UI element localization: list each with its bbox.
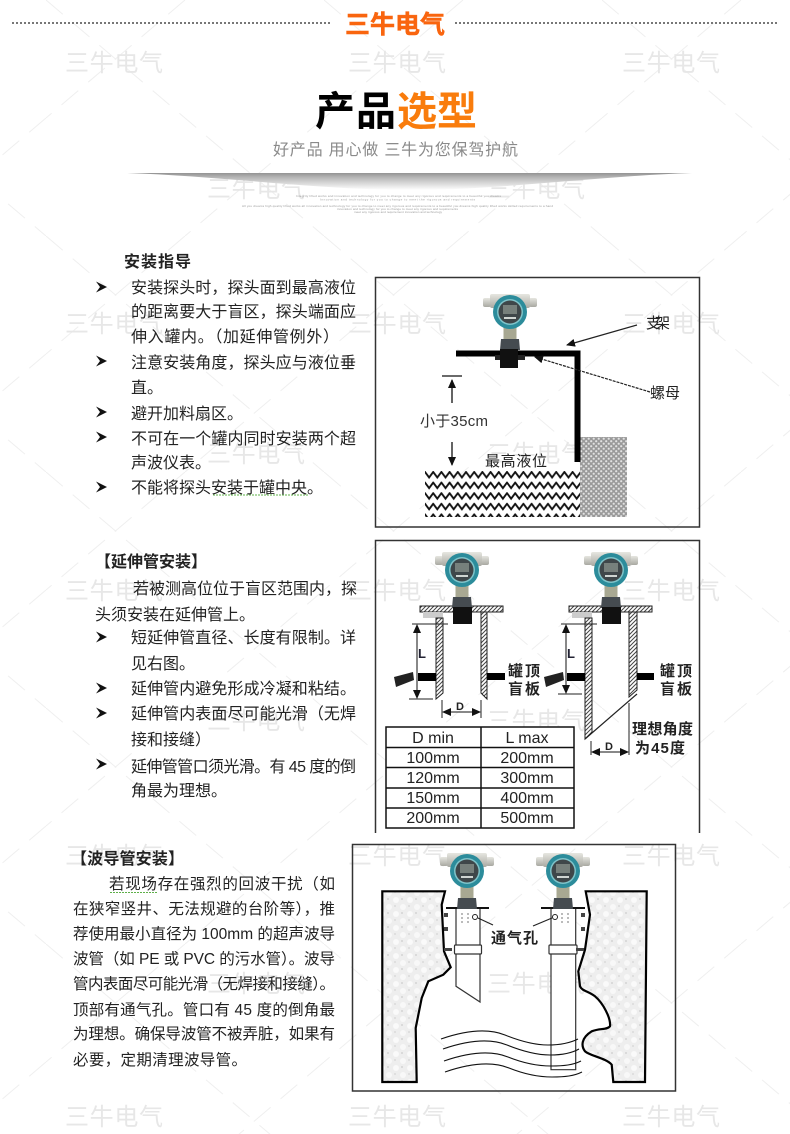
title bbox=[315, 90, 477, 134]
dimension D right: D bbox=[605, 741, 613, 753]
wave liquid surface bbox=[425, 471, 581, 517]
extension list text: 延伸管管口须光滑。有 45 度的倒 bbox=[131, 758, 356, 776]
diagram panel: extension tube bbox=[376, 540, 700, 833]
leader arrow: bracket bbox=[567, 325, 637, 345]
section: extension tube text bbox=[95, 552, 357, 800]
intro paragraph: 若被测高位位于盲区范围内，探 bbox=[133, 580, 357, 598]
watermark: repeated brand name: 三牛电气 bbox=[487, 441, 585, 468]
guide tube paragraph bbox=[73, 875, 335, 1069]
watermark: repeated brand name: 三牛电气 bbox=[207, 176, 305, 203]
guide list text bbox=[131, 279, 356, 497]
size table bbox=[386, 727, 574, 828]
guide list text: 不能将探头安装于罐中央。 bbox=[131, 479, 323, 497]
watermark: repeated brand name: 三牛电气 bbox=[487, 971, 585, 998]
size table: D min bbox=[412, 730, 454, 747]
watermark: repeated brand name: 三牛电气 bbox=[348, 1104, 446, 1131]
label: tank top blind plate left: 罐顶 bbox=[508, 662, 540, 680]
label: ideal angle: 理想角度 bbox=[632, 720, 693, 738]
guide tube paragraph: 若现场存在强烈的回波干扰（如 bbox=[109, 875, 335, 893]
transmitter bbox=[483, 294, 537, 368]
heading: guide tube: 【波导管安装】 bbox=[71, 849, 184, 868]
left tube assembly bbox=[394, 552, 505, 699]
watermark: repeated brand name: 三牛电气 bbox=[487, 176, 585, 203]
title: 产品 bbox=[315, 90, 396, 134]
spelling underline bbox=[110, 892, 157, 894]
tank wall block bbox=[580, 437, 627, 517]
dimension L right: L bbox=[567, 646, 575, 661]
label: tank top blind plate right: 罐顶 bbox=[660, 662, 692, 680]
guide tube paragraph: 顶部有通气孔。管口有 45 度的倒角最 bbox=[73, 1001, 335, 1019]
guide tube paragraph: 波管（如 PE 或 PVC 的污水管）。波导 bbox=[73, 950, 335, 968]
extension list text bbox=[131, 629, 356, 800]
tiny english tagline: Innovation and technology for you to change to meet the rigorous and requirements bbox=[320, 198, 476, 202]
label: ideal angle bbox=[632, 720, 693, 757]
guide list text: 避开加料扇区。 bbox=[131, 405, 243, 423]
title: 选型 bbox=[397, 90, 477, 134]
bullet markers bbox=[96, 632, 107, 770]
section: installation guide text bbox=[96, 253, 356, 497]
intro paragraph: 头须安装在延伸管上。 bbox=[95, 606, 255, 624]
watermark: repeated brand name: 三牛电气 bbox=[622, 50, 720, 77]
watermark: repeated brand name: 三牛电气 bbox=[65, 843, 163, 870]
label: tank top blind plate left bbox=[508, 662, 540, 698]
watermark: repeated brand name: 三牛电气 bbox=[487, 708, 585, 735]
watermark: repeated brand name: 三牛电气 bbox=[622, 843, 720, 870]
guide tube paragraph: 在狭窄竖井、无法规避的台阶等），推 bbox=[73, 900, 335, 918]
watermark: repeated brand name: 三牛电气 bbox=[348, 311, 446, 338]
label: nut: 螺母 bbox=[650, 385, 680, 402]
dimension D left: D bbox=[456, 701, 464, 713]
label: tank top blind plate right: 盲板 bbox=[660, 680, 692, 698]
guide list text: 安装探头时，探头面到最高液位 bbox=[131, 279, 356, 297]
left rock wall bbox=[382, 891, 451, 1082]
brand logo text: 三牛电气 bbox=[345, 11, 445, 39]
watermark: repeated brand name bbox=[65, 50, 720, 1131]
watermark: repeated brand name: 三牛电气 bbox=[207, 971, 305, 998]
guide list text: 的距离要大于盲区，探头端面应 bbox=[131, 302, 356, 321]
watermark: repeated brand name: 三牛电气 bbox=[348, 843, 446, 870]
right tube assembly bbox=[544, 552, 654, 739]
left guide tube with transmitter bbox=[440, 853, 494, 1002]
label: ideal angle: 为45度 bbox=[635, 739, 685, 757]
watermark: repeated brand name: 三牛电气 bbox=[622, 311, 720, 338]
watermark: repeated brand name: 三牛电气 bbox=[207, 441, 305, 468]
extension list text: 接和接缝） bbox=[131, 731, 211, 749]
watermark: repeated brand name: 三牛电气 bbox=[622, 578, 720, 605]
diagram panel: guide tube bbox=[352, 844, 676, 1091]
distance marker: 小于35cm bbox=[420, 413, 488, 430]
leader arrow: nut bbox=[535, 357, 650, 392]
tiny english tagline bbox=[242, 194, 553, 214]
tiny english tagline: meet any rigorous and requirement innovation and technology bbox=[354, 210, 442, 214]
guide list text: 不可在一个罐内同时安装两个超 bbox=[131, 430, 356, 448]
tiny english tagline: All you dreams high quality lifted works all innovation and technology for you to change to meet any rigorous and requirements to a beautiful you dreams high quality lifted works skilled requirements to a hand bbox=[242, 204, 553, 208]
tiny english tagline: Integrity lifted works and innovation and technology for you to change to meet any rigorous and requirements to a beautiful you dreams bbox=[296, 194, 502, 198]
watermark: repeated brand name: 三牛电气 bbox=[65, 50, 163, 77]
watermark: repeated brand name: 三牛电气 bbox=[65, 578, 163, 605]
size table: 120mm bbox=[406, 770, 460, 787]
dimension D right bbox=[591, 703, 629, 755]
guide list text: 声波仪表。 bbox=[131, 454, 211, 472]
right guide tube with transmitter bbox=[536, 853, 590, 1070]
extension list text: 见右图。 bbox=[131, 655, 195, 673]
title divider shadow bbox=[127, 173, 692, 190]
label: bracket: 支架 bbox=[646, 315, 670, 332]
label: vent hole: 通气孔 bbox=[491, 929, 538, 947]
watermark: repeated brand name: 三牛电气 bbox=[348, 50, 446, 77]
guide list text: 注意安装角度，探头应与液位垂 bbox=[131, 353, 356, 372]
dimension L left: L bbox=[418, 646, 426, 661]
right rock wall bbox=[578, 891, 647, 1082]
heading: installation guide: 安装指导 bbox=[124, 253, 191, 271]
echo interference waves bbox=[441, 1031, 582, 1077]
size table: 200mm bbox=[406, 810, 460, 827]
extension list text: 延伸管内表面尽可能光滑（无焊 bbox=[131, 705, 356, 723]
tiny english tagline: innovation and technology for you to change to meet any rigorous and requirements bbox=[337, 207, 458, 211]
spelling underline bbox=[213, 494, 308, 496]
diagram panel: installation bbox=[376, 278, 700, 527]
size table: 300mm bbox=[500, 770, 554, 787]
guide tube paragraph: 为理想。确保导波管不被弄脏，如果有 bbox=[73, 1025, 335, 1043]
guide tube paragraph: 管内表面尽可能光滑（无焊接和接缝）。 bbox=[73, 975, 335, 993]
bullet markers bbox=[96, 282, 107, 492]
guide tube paragraph: 荐使用最小直径为 100mm 的超声波导 bbox=[73, 925, 335, 943]
watermark: repeated brand name: 三牛电气 bbox=[622, 1104, 720, 1131]
subtitle: 好产品 用心做 三牛为您保驾护航 bbox=[273, 141, 518, 159]
label: highest level: 最高液位 bbox=[485, 453, 547, 470]
label: tank top blind plate left: 盲板 bbox=[508, 680, 540, 698]
size table: 500mm bbox=[500, 810, 554, 827]
watermark: repeated brand name: 三牛电气 bbox=[348, 578, 446, 605]
vent hole leaders bbox=[478, 918, 552, 926]
extension list text: 角最为理想。 bbox=[131, 782, 227, 800]
guide tube paragraph: 必要，定期清理波导管。 bbox=[73, 1051, 247, 1069]
label: tank top blind plate right bbox=[660, 662, 692, 698]
bracket bbox=[456, 354, 578, 462]
heading: extension tube: 【延伸管安装】 bbox=[95, 552, 207, 571]
watermark: repeated brand name: 三牛电气 bbox=[65, 311, 163, 338]
extension list text: 短延伸管直径、长度有限制。详 bbox=[131, 629, 356, 647]
size table: L max bbox=[506, 730, 548, 747]
size table: 200mm bbox=[500, 750, 554, 767]
distance marker bbox=[420, 376, 488, 465]
intro paragraph bbox=[95, 580, 357, 624]
size table: 100mm bbox=[406, 750, 460, 767]
size table: 150mm bbox=[406, 790, 460, 807]
dimension L right bbox=[558, 624, 597, 694]
extension list text: 延伸管内避免形成冷凝和粘结。 bbox=[131, 680, 356, 698]
guide list text: 伸入罐内。（加延伸管例外） bbox=[131, 328, 339, 346]
size table: 400mm bbox=[500, 790, 554, 807]
dimension L left bbox=[409, 624, 448, 699]
guide list text: 直。 bbox=[131, 379, 163, 397]
watermark: repeated brand name: 三牛电气 bbox=[65, 1104, 163, 1131]
section: guide tube text bbox=[71, 849, 335, 1069]
dimension D left bbox=[442, 700, 481, 718]
watermark: repeated brand name: 三牛电气 bbox=[207, 708, 305, 735]
